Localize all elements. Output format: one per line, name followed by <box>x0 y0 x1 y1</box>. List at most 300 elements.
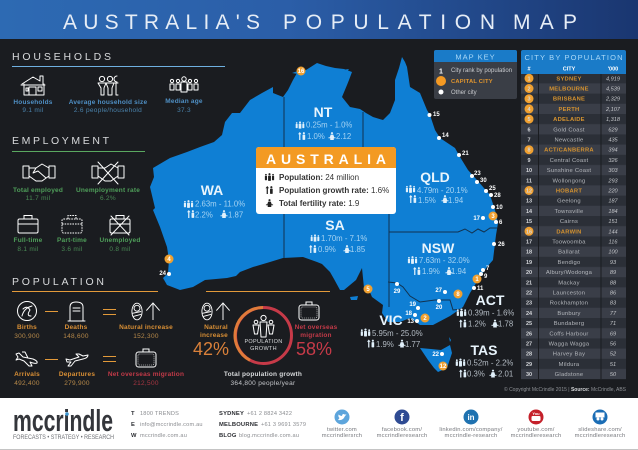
linkedin link: mccrindle-research <box>445 433 497 439</box>
icon: household family <box>98 76 118 95</box>
table rows: 303 <box>608 168 619 174</box>
state: ACT: 1.78 <box>498 320 513 328</box>
contact details: T <box>131 411 135 417</box>
table rows: BRISBANE <box>553 97 585 103</box>
state: WA: WA <box>201 182 223 198</box>
table rows: 50 <box>610 372 617 378</box>
twitter link: mccrindlersrch <box>322 433 362 439</box>
city markers: 29 <box>394 289 401 295</box>
state: NT <box>296 104 352 141</box>
section: employment <box>12 135 145 253</box>
city markers: 27 <box>435 288 443 294</box>
table rows: 11 <box>526 178 532 184</box>
arrivals stat: 492,400 <box>14 380 40 387</box>
panel: map key: 1 <box>439 68 443 76</box>
map of Australia <box>150 57 498 372</box>
twitter link <box>322 427 362 439</box>
state: NT: 1.0% <box>307 132 325 141</box>
contact details: E <box>131 422 135 428</box>
state: QLD: 1.5% <box>418 196 436 205</box>
city markers: 30 <box>480 178 487 184</box>
Kangaroo Island and islands <box>292 69 451 342</box>
office details: SYDNEY <box>219 411 244 417</box>
state: VIC <box>361 312 423 349</box>
net overseas stat: 212,500 <box>133 380 159 387</box>
Tasmania <box>420 345 452 372</box>
table rows: PERTH <box>559 107 579 113</box>
table rows: 5 <box>527 117 531 123</box>
deaths stat: Deaths <box>65 324 88 331</box>
icon: linkedin: in <box>467 413 475 422</box>
mccrindle logo: mccrindle <box>13 403 113 438</box>
youtube link <box>511 427 561 439</box>
city markers: 1 <box>475 277 479 283</box>
households heading: HOUSEHOLDS <box>12 51 111 63</box>
twitter link: twitter.com <box>327 427 357 433</box>
city markers: 24 <box>159 271 167 277</box>
panel: city by population table: # <box>527 66 531 72</box>
city markers: 25 <box>489 186 496 192</box>
state: QLD: 1.94 <box>448 196 464 205</box>
city markers: 13 <box>407 319 415 325</box>
panel: map key: CAPITAL CITY <box>451 79 493 85</box>
table rows: 89 <box>610 270 616 276</box>
table rows: 69 <box>610 331 616 337</box>
table rows: 88 <box>610 280 617 286</box>
table rows: Launceston <box>553 290 585 296</box>
state: SA: 1.70m - 7.1% <box>321 234 367 243</box>
state: ACT <box>457 292 514 328</box>
table rows: Bunbury <box>557 311 581 317</box>
table rows: Wagga Wagga <box>549 342 590 348</box>
households stat: Households <box>13 99 53 106</box>
table rows: Mildura <box>559 362 580 368</box>
panel: map key: Other city <box>451 90 477 96</box>
natural increase stat: Natural increase <box>119 324 173 331</box>
unemployed stat <box>99 237 141 253</box>
state: WA: 1.87 <box>228 210 243 220</box>
deaths stat: 148,600 <box>63 333 89 340</box>
table rows: 1 <box>527 76 531 82</box>
table rows: Harvey Bay <box>553 352 585 358</box>
table rows: MELBOURNE <box>549 86 589 92</box>
office details: blog.mccrindle.com.au <box>239 433 299 439</box>
unemployment stat <box>76 187 140 202</box>
table rows: 18 <box>526 250 532 256</box>
state: TAS: TAS <box>471 342 497 358</box>
net overseas stat <box>108 371 184 387</box>
state: SA: SA <box>325 217 345 233</box>
city markers: 12 <box>440 364 447 370</box>
table rows: 9 <box>527 158 531 164</box>
state: ACT: 1.2% <box>468 320 486 328</box>
table rows: 21 <box>526 280 532 286</box>
linkedin link: linkedin.com/company/ <box>439 427 503 433</box>
youtube link: mccrindleresearch <box>511 433 561 439</box>
table rows: Rockhampton <box>550 301 588 307</box>
state: NT: 0.25m - 1.0% <box>306 120 352 130</box>
table rows: Newcastle <box>554 138 584 144</box>
state: VIC: VIC <box>379 312 403 328</box>
table rows: 2 <box>527 86 531 92</box>
icon: slideshare <box>592 410 608 424</box>
icon: part-time bag <box>62 216 82 233</box>
capital rank badges <box>524 74 534 236</box>
table rows: ADELAIDE <box>553 117 585 123</box>
state: NSW <box>408 240 470 276</box>
table rows: 25 <box>526 321 532 327</box>
table rows: 29 <box>526 362 532 368</box>
table rows: 6 <box>527 127 531 133</box>
table rows: Geelong <box>557 199 581 205</box>
table rows: 26 <box>526 331 532 337</box>
table rows: 71 <box>610 321 616 327</box>
table rows: Coffs Harbour <box>549 331 589 337</box>
city markers: 11 <box>477 286 484 292</box>
state: QLD: 4.79m - 20.1% <box>417 186 468 195</box>
table rows: 19 <box>526 260 532 266</box>
part-time stat <box>57 237 87 253</box>
state: SA <box>309 217 367 254</box>
icon: unemployment crossed handshake <box>92 162 124 184</box>
employment heading: EMPLOYMENT <box>12 135 110 147</box>
table rows: Central Coast <box>550 158 588 164</box>
icon: youtube: You <box>532 411 540 416</box>
state: NSW: 1.94 <box>451 267 467 276</box>
departures stat: Departures <box>59 371 95 378</box>
table rows: Ballarat <box>558 250 580 256</box>
icon: median age people <box>170 77 198 92</box>
population line: Population: 24 million <box>279 173 359 182</box>
natural increase stat: 152,300 <box>133 333 159 340</box>
panel: map key <box>434 50 517 99</box>
table rows: HOBART <box>556 188 582 194</box>
table rows: 629 <box>608 127 618 133</box>
net overseas share: Net overseas <box>295 324 338 331</box>
table rows: 2,329 <box>605 97 620 103</box>
natural increase share: 42% <box>193 339 229 359</box>
icon: births <box>18 302 36 320</box>
table rows: 17 <box>526 240 532 246</box>
minus sign <box>45 359 58 360</box>
slideshare link <box>575 427 625 439</box>
state: ACT: 0.39m - 1.6% <box>468 308 514 318</box>
icon: departures plane <box>66 354 88 366</box>
table rows: 30 <box>526 372 532 378</box>
icon: full-time bag <box>18 216 38 233</box>
state: VIC: 1.9% <box>376 340 394 349</box>
facebook link: facebook.com/ <box>382 427 422 433</box>
median age stat <box>165 98 203 114</box>
unemployed stat: Unemployed <box>99 237 141 244</box>
office details: +61 2 8824 3422 <box>247 411 292 417</box>
departures stat <box>59 371 95 387</box>
icon: deaths <box>68 302 85 321</box>
state: WA <box>184 182 245 220</box>
state: QLD <box>406 169 468 205</box>
Australia summary card <box>256 147 396 214</box>
table rows: Mackay <box>558 280 580 286</box>
table rows: 56 <box>610 342 617 348</box>
table rows: 326 <box>608 158 619 164</box>
table rows: 20 <box>526 270 532 276</box>
fertility line: Total fertility rate: 1.9 <box>279 199 360 208</box>
city markers: 20 <box>436 305 443 311</box>
panel: city by population table <box>521 50 626 379</box>
panel: map key: City rank by population <box>451 68 512 74</box>
households stat <box>13 99 53 114</box>
state: QLD: QLD <box>420 169 450 185</box>
state borders <box>284 97 497 310</box>
table rows: 16 <box>526 229 532 235</box>
table rows: 1,318 <box>606 117 621 123</box>
facebook link: mccrindleresearch <box>377 433 427 439</box>
table rows: Bendigo <box>557 260 581 266</box>
table rows: 187 <box>608 199 619 205</box>
icon: youtube <box>528 410 544 424</box>
mccrindle logo <box>13 403 114 441</box>
table rows: 7 <box>527 138 531 144</box>
city markers: 19 <box>409 302 417 308</box>
births stat <box>14 324 40 340</box>
table rows: 83 <box>610 301 617 307</box>
table rows: Albury/Wodonga <box>546 270 593 276</box>
equals sign <box>103 356 116 362</box>
table rows: 2,107 <box>605 107 621 113</box>
city markers: 9 <box>484 274 488 280</box>
state: NSW: NSW <box>422 240 455 256</box>
state: TAS: 0.52m - 2.2% <box>467 358 513 368</box>
city markers: 16 <box>298 69 305 75</box>
city markers: 28 <box>494 193 501 199</box>
population growth ring: GROWTH <box>250 346 277 352</box>
employed stat: Total employed <box>13 187 63 194</box>
state: ACT: ACT <box>476 292 505 308</box>
panel: city by population table: CITY <box>563 66 576 72</box>
city markers: 23 <box>474 171 481 177</box>
contact details <box>131 411 203 439</box>
table rows: Townsville <box>555 209 583 215</box>
icon: natural increase <box>132 303 160 320</box>
household size stat <box>69 99 147 114</box>
city markers: 7 <box>486 266 490 272</box>
table rows: Toowoomba <box>552 240 586 246</box>
table rows: 116 <box>609 240 618 246</box>
state: NT: NT <box>314 104 333 120</box>
households stat: 9.1 mil <box>22 107 44 114</box>
table rows: Sunshine Coast <box>547 168 591 174</box>
contact details: W <box>131 433 137 439</box>
natural increase share <box>193 303 230 359</box>
section: population <box>12 276 338 387</box>
net overseas share: 58% <box>296 339 332 359</box>
linkedin link <box>439 427 503 439</box>
icon: twitter <box>334 410 350 424</box>
median age stat: 37.3 <box>177 107 191 114</box>
title: MAP <box>513 11 577 34</box>
table rows: 23 <box>526 301 532 307</box>
office details <box>219 411 306 439</box>
table rows: 435 <box>608 138 619 144</box>
table rows: 22 <box>526 290 532 296</box>
city markers: 4 <box>167 257 171 263</box>
state: SA: 0.9% <box>318 245 336 254</box>
table rows: 4,919 <box>606 76 620 82</box>
icon: handshake <box>23 164 55 181</box>
table rows: 220 <box>607 188 619 194</box>
population heading: POPULATION <box>12 276 104 288</box>
youtube link: youtube.com/ <box>517 427 555 433</box>
state: VIC: 5.95m - 25.0% <box>372 329 423 338</box>
state: WA: 2.2% <box>195 210 213 220</box>
median age stat: Median age <box>165 98 203 105</box>
table rows: 13 <box>526 199 532 205</box>
icon: suitcase <box>136 349 156 367</box>
employed stat <box>13 187 63 202</box>
table rows: 394 <box>608 148 618 154</box>
panel: map key: MAP KEY <box>455 52 496 62</box>
state: NSW: 7.63m - 32.0% <box>419 256 470 265</box>
total population growth: 364,800 people/year <box>231 380 296 387</box>
state: WA: 2.63m - 11.0% <box>195 200 245 208</box>
births stat: 300,900 <box>14 333 40 340</box>
city markers: 2 <box>423 316 427 322</box>
contact details: 1800 TRENDS <box>140 411 179 417</box>
minus sign <box>45 311 58 312</box>
table rows: 4 <box>527 107 531 113</box>
growth line: Population growth rate: 1.6% <box>279 186 389 195</box>
table rows: 12 <box>526 188 532 194</box>
total population growth: Total population growth <box>224 371 302 378</box>
office details: MELBOURNE <box>219 422 258 428</box>
city markers: 6 <box>499 220 503 226</box>
section: households <box>12 51 225 114</box>
city markers: 10 <box>496 205 503 211</box>
state: TAS: 0.3% <box>467 370 485 378</box>
copyright note: © Copyright McCrindle 2015 | Source: McCrindle, ABS <box>504 386 627 393</box>
state: SA: 1.85 <box>350 245 366 254</box>
table rows: 8 <box>527 148 531 154</box>
panel: city by population table: '000 <box>608 66 618 72</box>
table rows: 100 <box>608 250 619 256</box>
office details: +61 3 9691 3579 <box>261 422 306 428</box>
part-time stat: Part-time <box>57 237 87 244</box>
footer <box>0 398 638 450</box>
city markers: 15 <box>433 112 440 118</box>
state: TAS <box>456 342 513 378</box>
title <box>63 11 577 34</box>
city markers: 5 <box>366 287 370 293</box>
table rows: SYDNEY <box>556 76 582 82</box>
state: VIC: 1.77 <box>405 340 420 349</box>
household size stat: 2.6 people/household <box>74 107 142 114</box>
table rows: Cairns <box>560 219 578 225</box>
table rows: 28 <box>526 352 532 358</box>
mccrindle logo: FORECASTS • STRATEGY • RESEARCH <box>13 435 114 441</box>
full-time stat <box>14 237 43 253</box>
table rows: 93 <box>610 260 617 266</box>
slideshare link: slideshare.com/ <box>578 427 622 433</box>
icon: unemployed bag <box>110 216 130 235</box>
table rows: 15 <box>526 219 532 225</box>
contact details: info@mccrindle.com.au <box>140 422 203 428</box>
facebook link <box>377 427 427 439</box>
departures stat: 279,900 <box>64 380 90 387</box>
unemployment stat: Unemployment rate <box>76 187 140 194</box>
table rows: Bundaberg <box>554 321 584 327</box>
natural increase stat <box>119 324 173 340</box>
table rows: 151 <box>608 219 618 225</box>
contact details: mccrindle.com.au <box>140 433 187 439</box>
unemployed stat: 0.8 mil <box>109 246 131 253</box>
table rows <box>526 76 621 378</box>
table rows: 14 <box>526 209 533 215</box>
city markers: 3 <box>491 214 495 220</box>
household size stat: Average household size <box>69 99 147 106</box>
state: NT: 2.12 <box>336 132 351 141</box>
full-time stat: 8.1 mil <box>17 246 39 253</box>
card header: AUSTRALIA <box>266 151 386 167</box>
table rows: 4,539 <box>606 86 620 92</box>
city markers: 22 <box>432 352 440 358</box>
table rows: 86 <box>610 290 617 296</box>
arrivals stat: Arrivals <box>14 371 40 378</box>
equals sign <box>103 310 116 314</box>
natural increase share: increase <box>200 332 228 339</box>
icon: facebook <box>394 410 410 424</box>
unemployment stat: 6.2% <box>100 195 116 202</box>
icon: facebook: f <box>400 412 404 424</box>
city markers: 14 <box>442 133 449 139</box>
net overseas share <box>295 302 338 359</box>
table rows: 52 <box>610 352 617 358</box>
title: POPULATION <box>283 11 495 34</box>
table rows: 144 <box>608 229 618 235</box>
icon: linkedin <box>464 410 478 424</box>
city markers: 26 <box>498 242 505 248</box>
icon: arrivals plane <box>16 352 37 366</box>
icon: house <box>21 76 45 95</box>
city markers: 21 <box>462 151 469 157</box>
city markers <box>159 66 505 370</box>
natural increase share: Natural <box>204 324 228 331</box>
table rows: Wollongong <box>552 178 586 184</box>
table rows: 51 <box>610 362 616 368</box>
state: TAS: 2.01 <box>498 370 513 378</box>
header banner <box>0 0 638 39</box>
table rows: 10 <box>526 168 532 174</box>
table rows: 3 <box>527 97 531 103</box>
full-time stat: Full-time <box>14 237 43 244</box>
state: NSW: 1.9% <box>422 267 440 276</box>
table rows: 24 <box>526 311 533 317</box>
net overseas share: migration <box>300 332 332 339</box>
city markers: 8 <box>456 292 460 298</box>
table rows: ACT/CANBERRA <box>544 148 594 154</box>
title: AUSTRALIA'S <box>63 11 260 34</box>
table rows: 293 <box>607 178 619 184</box>
population growth ring: POPULATION <box>244 339 283 345</box>
table rows: Gladstone <box>555 372 583 378</box>
arrivals stat <box>14 371 40 387</box>
table rows: 77 <box>610 311 617 317</box>
part-time stat: 3.6 mil <box>61 246 83 253</box>
city markers: 18 <box>405 311 413 317</box>
total population growth <box>224 371 302 387</box>
office details: BLOG <box>219 433 237 439</box>
employed stat: 11.7 mil <box>26 195 51 202</box>
table rows: DARWIN <box>556 229 582 235</box>
